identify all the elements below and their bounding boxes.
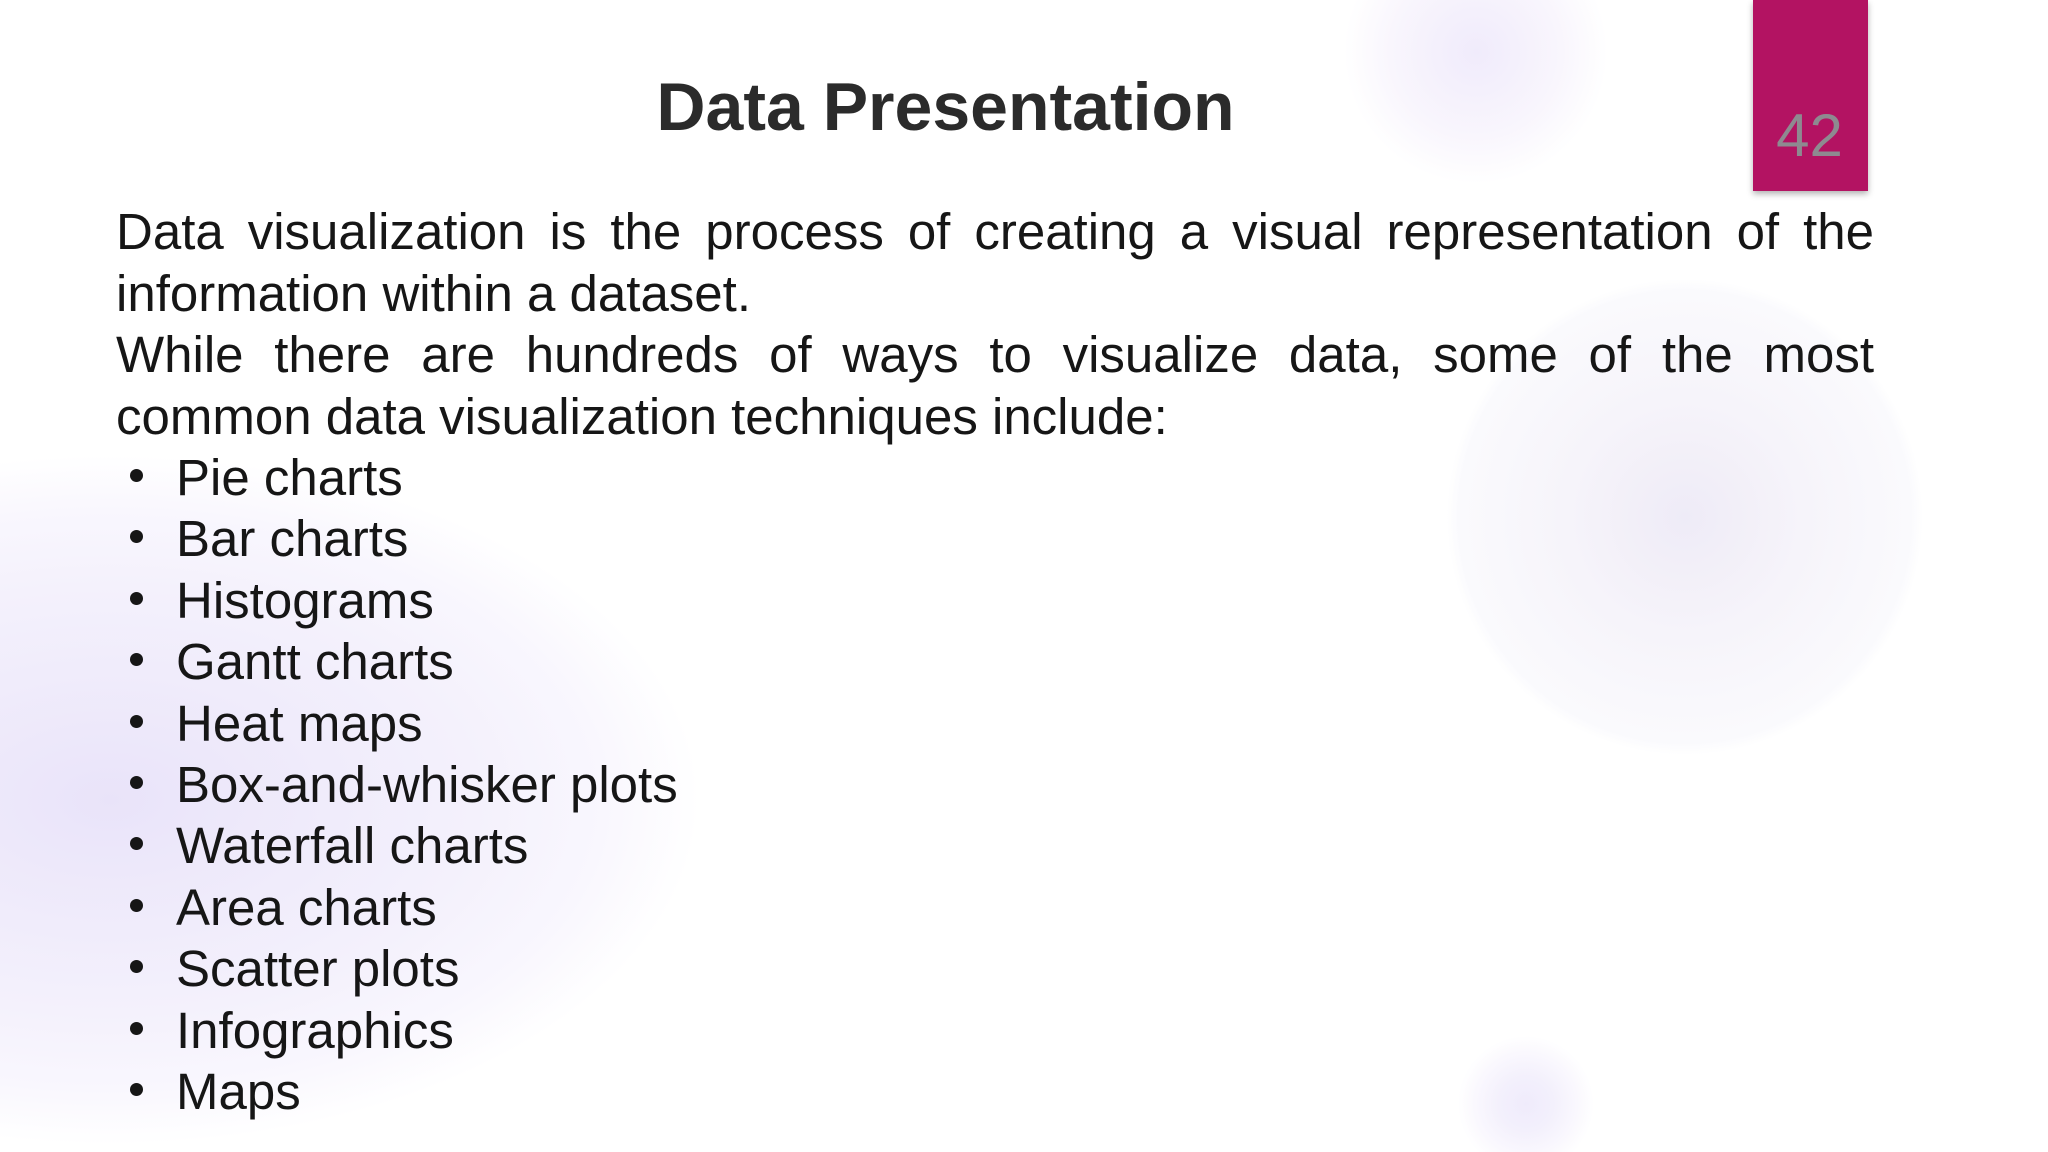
intro paragraph: common data visualization techniques include: [116, 388, 1168, 445]
bullet list of techniques: Bar charts [176, 510, 408, 567]
bullet list of techniques: Maps [176, 1063, 301, 1120]
title: Data Presentation [656, 69, 1235, 145]
bullet list of techniques [130, 449, 678, 1120]
intro paragraph [116, 203, 1874, 445]
background blob: right circle [1446, 279, 1924, 757]
bullet list of techniques: Heat maps [176, 695, 423, 752]
bullet list of techniques: Box-and-whisker plots [176, 756, 678, 813]
intro paragraph: Data visualization is the process of creating a visual representation of the [116, 203, 1874, 260]
intro paragraph: information within a dataset. [116, 265, 751, 322]
page number: 42 [1776, 102, 1843, 169]
intro paragraph: While there are hundreds of ways to visualize data, some of the most [116, 326, 1874, 383]
bullet list of techniques: Area charts [176, 879, 437, 936]
background blob: left large [0, 440, 720, 1152]
bullet list of techniques: Waterfall charts [176, 817, 528, 874]
background blob: top [1340, 0, 1612, 185]
bullet list of techniques: Gantt charts [176, 633, 454, 690]
page number tab [1753, 0, 1868, 191]
background blob: bottom [1450, 1035, 1606, 1152]
bullet list of techniques: Infographics [176, 1002, 454, 1059]
bullet list of techniques: Scatter plots [176, 940, 459, 997]
bullet list of techniques: Histograms [176, 572, 434, 629]
bullet list of techniques: Pie charts [176, 449, 403, 506]
